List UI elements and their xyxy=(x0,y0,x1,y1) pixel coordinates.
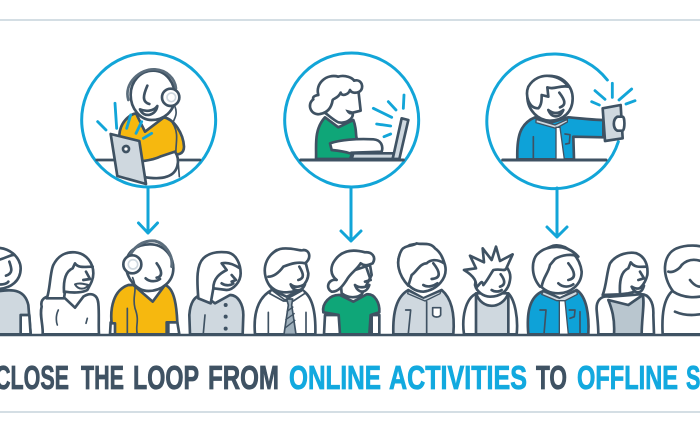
person: woman in white xyxy=(41,252,99,334)
arrow: agent to customer xyxy=(138,188,158,233)
ground line under crowd xyxy=(0,334,700,336)
title: close the loop headline: TO xyxy=(536,359,567,396)
person: man with headset in yellow xyxy=(110,241,179,334)
crowd: middle group of three people xyxy=(255,243,454,334)
icon: man with phone in circle xyxy=(487,54,635,189)
icon: woman at laptop in circle xyxy=(285,53,419,187)
person: woman in grey with buttons xyxy=(189,252,243,334)
title: close the loop headline xyxy=(0,359,700,396)
title: close the loop headline: ONLINE xyxy=(289,359,381,396)
person: cropped man at right edge xyxy=(662,246,700,334)
person: cropped man in grey xyxy=(0,248,31,334)
title: close the loop headline: ACTIVITIES xyxy=(389,359,527,396)
title: close the loop headline: FROM xyxy=(208,359,279,396)
arrow: phone man to customer xyxy=(547,188,567,237)
title: close the loop headline: THE xyxy=(81,359,124,396)
arrow: laptop woman to customer xyxy=(341,188,361,241)
person: man with striped tie xyxy=(255,248,315,334)
crowd: left group of four people xyxy=(0,241,243,334)
person: woman in grey vest xyxy=(597,253,654,334)
title: close the loop headline: LOOP xyxy=(133,359,199,396)
person: man with pocket in grey xyxy=(393,243,454,334)
person: woman in green xyxy=(323,251,379,334)
crowd: right group of four people xyxy=(463,245,700,334)
person: man in blue shirt xyxy=(528,245,589,334)
icon: headset agent with tablet in circle xyxy=(82,53,216,187)
person: spiky hair man in tank top xyxy=(463,247,517,334)
